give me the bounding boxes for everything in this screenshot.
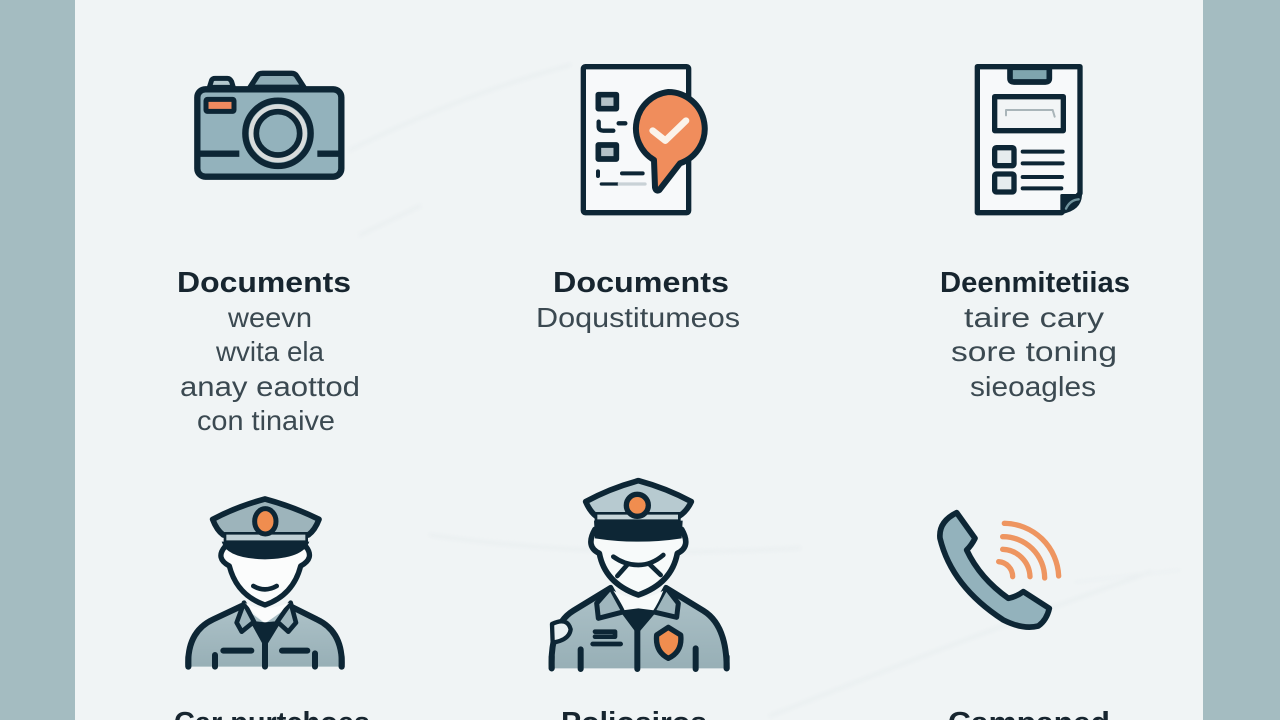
text block: column 1: Documents: [177, 267, 351, 299]
icon: camera: [197, 73, 341, 177]
text block: column 3: Deenmitetiias: [940, 267, 1130, 299]
text block: column 1: anay eaottod: [180, 371, 360, 402]
text block: column 1: [177, 267, 360, 436]
text block: column 3: sieoagles: [970, 371, 1096, 402]
icon: checklist with speech bubble: [583, 67, 705, 213]
icon: clipboard form: [977, 67, 1081, 213]
icon: phone with signal waves: [940, 513, 1059, 627]
text block: column 1: wvita ela: [215, 336, 324, 367]
icon: officer with smile: [188, 499, 342, 667]
text block: column 3: [940, 267, 1130, 402]
text block: column 2: Documents: [553, 267, 729, 299]
text block: column 3: sore toning: [951, 336, 1117, 367]
text block: column 1: con tinaive: [197, 405, 335, 436]
text block: column 1: weevn: [227, 302, 312, 333]
text block: column 2: Doqustitumeos: [536, 302, 740, 333]
text block: column 3: taire cary: [964, 302, 1104, 333]
icon: police officer with badge: [552, 481, 727, 669]
text block: column 2: [536, 267, 740, 333]
